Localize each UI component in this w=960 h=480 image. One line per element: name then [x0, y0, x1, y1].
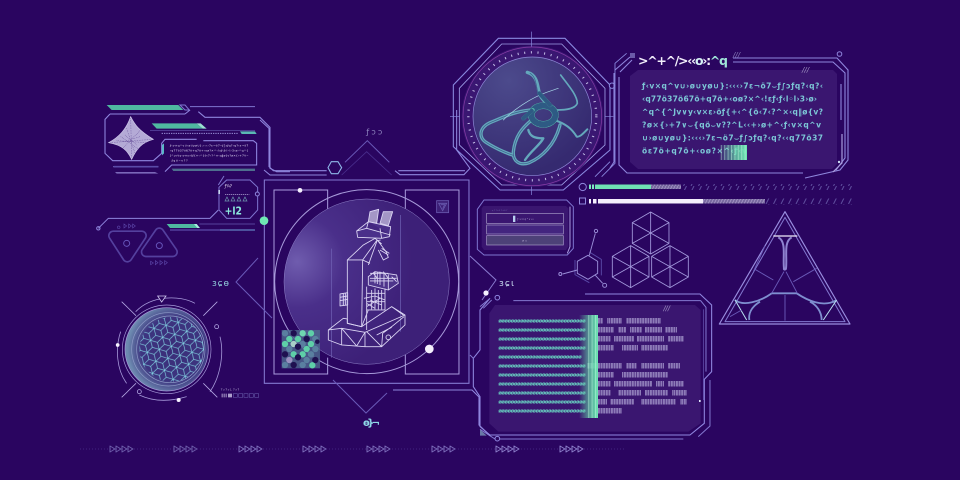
icon: molecule: [559, 229, 607, 287]
teal encoded rows: øøøøøøøøøøøøøøøøøøøøøøøøøøøø: [498, 346, 586, 352]
teal encoded rows: øøøøøøøøøøøøøøøøøøøøøøøøøøøø: [498, 373, 586, 379]
icon: geodesic sphere gauge: [116, 296, 259, 402]
icon: small emblem: [437, 201, 449, 213]
scanner bar: [579, 315, 598, 418]
panel frame: [610, 57, 848, 178]
form rows: ‹q77ö37ö67: [491, 210, 508, 212]
word blocks: [587, 318, 687, 414]
icon: triangle structure: [719, 212, 850, 324]
top teal bar: [107, 105, 183, 110]
icon: hexagon: [328, 162, 342, 174]
body text: ^q^{^Jv∨y‹v×ɛ›öƒ{+‹^{ö‹7‹?^×‹q‖ø{v?: [642, 108, 823, 118]
teal progress bar: [579, 183, 853, 191]
text block: ʃ^ɹv∨y‹v×ɛ›öƒ{+‹^{ö‹7‹?^×‹q‖ø{v?ø×{›+7∨⌣: [169, 154, 248, 158]
body text: [641, 82, 823, 156]
white progress bar: [580, 198, 853, 204]
panel: large data table: [470, 294, 712, 441]
tick ring: [468, 52, 596, 180]
body text: ?ø×{›+7∨⌣{qö⌣v??^L‹‹+›ø+^‹ƒ‹v×q^v: [642, 120, 821, 130]
panel: encrypted data text: ///: [801, 66, 810, 74]
text block: [162, 143, 248, 163]
icon: rounded triangle right: [146, 233, 173, 265]
form rows: [487, 210, 563, 245]
wireframe shape panel outline: [105, 110, 257, 172]
progress bars: [579, 183, 853, 204]
teal encoded rows: øøøøøøøøøøøøøøøøøøøøøøøøøøøø: [498, 337, 586, 343]
label glyphs: ƒɔɔ: [365, 128, 382, 137]
teal encoded rows: øøøøøøøøøøøøøøøøøøøøøøøøøøøø: [498, 328, 586, 334]
gauge arcs: [117, 298, 222, 400]
triangle row: [225, 197, 247, 201]
panel: small readout: [218, 176, 259, 218]
hexagon dot pattern: [282, 330, 320, 368]
body text: ∪›ø∪yø∪}:‹‹‹›7ɛ¬ö7⌣ƒ∫ɔƒq?‹q?‹‹q77ö37: [642, 134, 823, 142]
text block: ƒqö⌣v??: [171, 159, 188, 163]
left label: ɜɕɵ: [212, 279, 229, 289]
text block: ‹q77ö37ö67ö+q7ö+‹oø?×^‹!ɛƒ‹ƒ‹l◦l›3›ø›^q^{: [170, 149, 248, 153]
icon: spiky wireframe mesh: [109, 117, 153, 159]
panel: central microscope frame: [260, 180, 469, 383]
panel: large data table: ///: [662, 305, 671, 313]
icon: hexagon cubes: [612, 212, 688, 288]
icon: rounded triangle left: [113, 224, 142, 257]
microscope wireframe: [328, 209, 405, 347]
gauge caption: 7ɔ7ɔ⌊,7ɔ7: [221, 387, 239, 391]
panel fill: [630, 70, 837, 169]
teal encoded rows: øøøøøøøøøøøøøøøøøøøøøøøøøøøø: [498, 364, 586, 370]
teal encoded rows: øøøøøøøøøøøøøøøøøøøøøøøøøøøø: [498, 409, 586, 415]
text block: ƒ‹v×q^v∪›ø∪yø∪}:‹‹‹›7ɛ¬ö7⌣ƒ∫ɔƒq?‹q?‹ɛ¬ö7: [169, 144, 248, 148]
cube mesh: [139, 317, 204, 382]
form rows: ø∪: [522, 240, 527, 243]
teal bar and stripes: [152, 123, 203, 129]
teal encoded rows: [498, 319, 586, 415]
teal encoded rows: øøøøøøøøøøøøøøøøøøøøøøøøøøø: [498, 355, 582, 361]
body text: öɛ7ö+q7ö+‹oø?×^‹ƒ‹v: [642, 146, 747, 156]
large readout value: +l2: [225, 204, 242, 217]
teal node: [260, 216, 268, 225]
form rows: ƒ‹v×q^v∪›: [516, 218, 534, 221]
body text: ƒ‹v×q^v∪›ø∪yø∪}:‹‹‹›7ɛ¬ö7⌣ƒ∫ɔƒq?‹q?‹: [641, 82, 823, 90]
teal encoded rows: øøøøøøøøøøøøøøøøøøøøøøøøøøøø: [498, 319, 586, 325]
pink ring: [463, 47, 602, 186]
bottom label: ɵ}¬: [363, 418, 380, 429]
white nodes: [298, 188, 434, 353]
teal encoded rows: øøøøøøøøøøøøøøøøøøøøøøøøøøøø: [498, 400, 586, 406]
frame: [473, 294, 712, 435]
body text: ‹q77ö37ö67ö+q7ö+‹oø?×^‹!ɛƒ‹ƒ‹l◦l›3›ø›: [642, 94, 817, 104]
scope disc: [473, 57, 592, 176]
side chevrons and coordinate labels: [212, 256, 514, 429]
panel title: >^+^/>‹‹o›:^q: [638, 53, 728, 68]
scan block: [719, 145, 747, 160]
panel: encrypted data text: [610, 51, 848, 178]
top connector with hexagon and chevron: [260, 110, 470, 175]
bottom arrow track: [80, 446, 625, 452]
left bracket: [274, 190, 328, 374]
panel: mini input form: [477, 200, 573, 255]
right label: ɜɕɩ: [499, 279, 514, 289]
chevron: [345, 141, 389, 162]
panel: top-left data module: [105, 105, 290, 174]
outer ring: [275, 190, 459, 374]
panel: octagon organism scope: [450, 32, 627, 195]
connector with triangular nodes: [97, 210, 255, 265]
lens disc: [284, 199, 449, 364]
bottom-left connector: [393, 390, 490, 436]
teal encoded rows: øøøøøøøøøøøøøøøøøøøøøøøøøøøø: [498, 391, 586, 397]
panel: encrypted data text: ///: [732, 51, 741, 59]
organism: [481, 72, 587, 164]
teal encoded rows: øøøøøøøøøøøøøøøøøøøøøøøøøøøø: [498, 382, 586, 388]
label glyphs: ƒ¾ʔ: [224, 184, 232, 189]
right bracket: [405, 190, 459, 374]
